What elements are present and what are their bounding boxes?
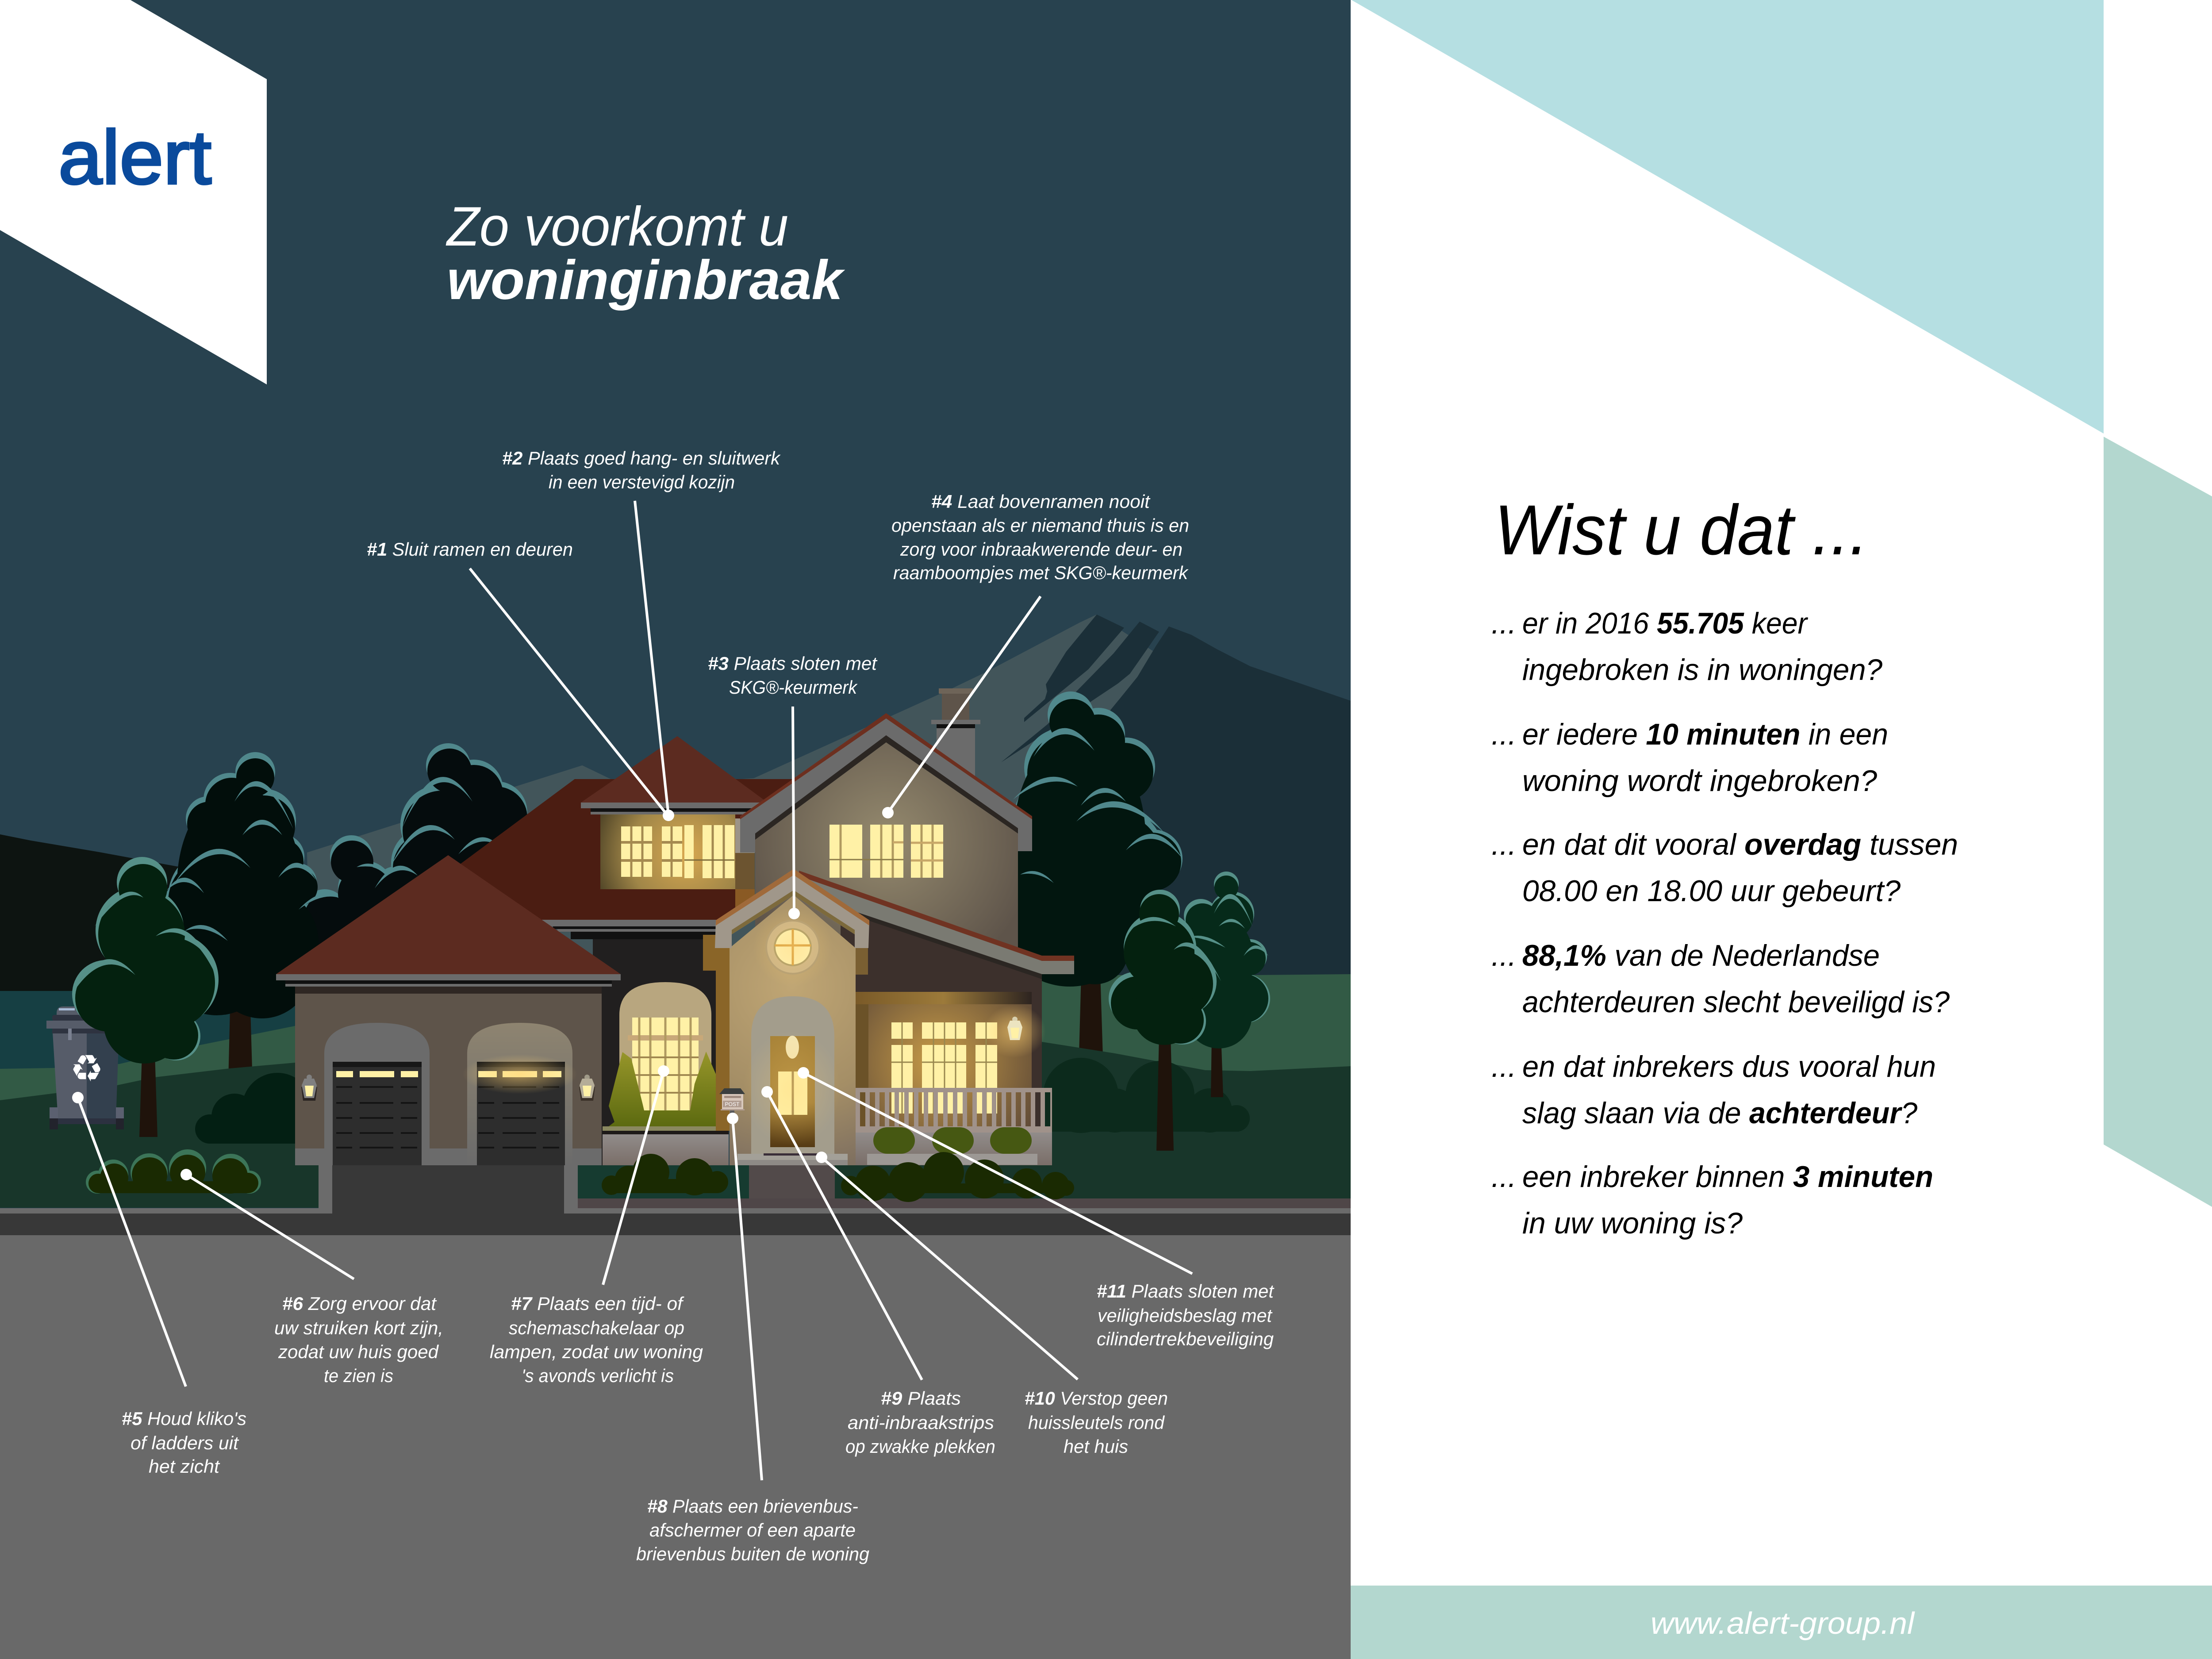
text block: facts: ingebroken is in woningen? <box>1522 653 1882 687</box>
text block: facts: en dat inbrekers dus vooral hun <box>1522 1050 1936 1083</box>
text: tip 11: #11 Plaats sloten met <box>1097 1281 1275 1302</box>
chimney <box>931 688 980 790</box>
text: tip 7: 's avonds verlicht is <box>522 1365 674 1386</box>
mailbox <box>719 1088 745 1118</box>
callout: #11 leader <box>798 1067 1192 1274</box>
text block: facts: 08.00 en 18.00 uur gebeurt? <box>1522 874 1901 908</box>
text: tip 8: afschermer of een aparte <box>649 1520 856 1540</box>
shrub right <box>841 1152 1074 1202</box>
text block: facts: in uw woning is? <box>1522 1206 1743 1240</box>
text: tip 8: #8 Plaats een brievenbus- <box>647 1496 858 1517</box>
text: tip 4: openstaan als er niemand thuis is en <box>891 515 1189 536</box>
mailbox: POST <box>725 1101 740 1107</box>
text: tip 10 <box>1025 1388 1168 1457</box>
illustration: back right small tree <box>1183 872 1270 1097</box>
panel: right info panel <box>1351 0 2212 1659</box>
text: tip 4 <box>891 491 1189 583</box>
callout: #5 leader <box>72 1092 186 1386</box>
illustration: tall tree behind house <box>997 691 1183 1071</box>
shrub left <box>86 1149 261 1194</box>
text: tip 2 <box>502 448 781 492</box>
text: tip 5 <box>122 1408 246 1477</box>
text: tip 9: #9 Plaats <box>881 1388 961 1409</box>
text block: facts: er in 2016 55.705 keer <box>1522 607 1808 640</box>
callout: #4 leader <box>882 596 1041 818</box>
text: tip 9: op zwakke plekken <box>845 1436 995 1457</box>
decoration: top triangle <box>1352 0 2104 434</box>
text: tip 7: lampen, zodat uw woning <box>490 1341 703 1362</box>
callout: #8 leader <box>727 1113 762 1480</box>
text: tip 6: zodat uw huis goed <box>278 1341 439 1362</box>
text: tip 5: #5 Houd kliko's <box>122 1408 246 1429</box>
text: tip 6: te zien is <box>324 1365 393 1386</box>
text block: facts: ... <box>1491 607 1517 640</box>
text: tip 1: #1 Sluit ramen en deuren <box>367 539 573 560</box>
text: tip 10: #10 Verstop geen <box>1025 1388 1168 1409</box>
text: tip 11: veiligheidsbeslag met <box>1098 1305 1273 1326</box>
text: tip 7: schemaschakelaar op <box>509 1317 684 1338</box>
callout: #10 leader <box>816 1152 1078 1379</box>
text: tip 8: brievenbus buiten de woning <box>636 1544 869 1564</box>
callout: #3 leader <box>788 707 800 919</box>
text: tip 6: #6 Zorg ervoor dat <box>282 1293 437 1314</box>
decoration: side band <box>2104 437 2212 1207</box>
cypress shrubs <box>609 1052 726 1126</box>
panel: logo block <box>0 0 267 384</box>
text: tip 5: of ladders uit <box>131 1432 239 1453</box>
icon: recycling symbol: ♻ <box>70 1047 104 1090</box>
text: tip 6 <box>274 1293 443 1386</box>
text: tip 3 <box>708 653 878 698</box>
text block: facts <box>1491 607 1958 1240</box>
callout: #7 leader <box>603 1065 669 1285</box>
callout: #9 leader <box>761 1086 922 1380</box>
text: tip 10: het huis <box>1064 1436 1128 1457</box>
text block: facts: woning wordt ingebroken? <box>1522 764 1877 798</box>
illustration: street and driveway <box>0 1165 1351 1659</box>
text: tip 2: in een verstevigd kozijn <box>549 472 735 492</box>
lamps <box>301 1005 1046 1101</box>
text: tip 10: huissleutels rond <box>1028 1412 1165 1433</box>
shed roof <box>799 871 1074 979</box>
text: tip 9 <box>845 1388 995 1457</box>
logo: alert: alert <box>58 115 211 200</box>
text block: facts: ... <box>1491 828 1517 861</box>
illustration: window glow <box>462 907 833 1094</box>
round window <box>766 921 819 974</box>
illustration: front left tree <box>72 857 219 1137</box>
text block: facts: 88,1% van de Nederlandse <box>1522 939 1880 972</box>
text: tip 3: SKG®-keurmerk <box>729 677 858 698</box>
text block: facts: slag slaan via de achterdeur? <box>1522 1096 1917 1130</box>
shrub centre <box>602 1154 728 1195</box>
garage door right <box>467 1023 572 1165</box>
garage roof <box>276 855 621 974</box>
text: tip 11 <box>1097 1281 1275 1349</box>
dormer with windows <box>581 736 768 920</box>
title: Zo voorkomt u <box>445 196 788 257</box>
callout: #1 leader <box>470 568 666 813</box>
text block: facts: er iedere 10 minuten in een <box>1522 718 1888 751</box>
text: tip 9: anti-inbraakstrips <box>848 1412 994 1433</box>
text: tip 4: raamboompjes met SKG®-keurmerk <box>893 562 1189 583</box>
text: tip 8 <box>636 1496 869 1564</box>
text: tip 6: uw struiken kort zijn, <box>274 1317 443 1338</box>
garage <box>276 855 621 1165</box>
title <box>445 196 845 311</box>
text: tip 3: #3 Plaats sloten met <box>708 653 878 674</box>
heading: Wist u dat: Wist u dat ... <box>1494 490 1868 569</box>
icon: recycling bin <box>46 1006 127 1129</box>
illustration: lower grass <box>0 1035 1351 1208</box>
porch wall <box>841 907 1042 1166</box>
garage door left <box>324 1023 430 1165</box>
illustration: mountains and hills <box>0 614 1351 1208</box>
front door <box>737 996 848 1165</box>
text: tip 11: cilindertrekbeveiliging <box>1097 1329 1274 1349</box>
text block: facts: een inbreker binnen 3 minuten <box>1522 1160 1933 1194</box>
text: tip 4: zorg voor inbraakwerende deur- en <box>900 539 1183 560</box>
illustration: front right small tree <box>1109 890 1221 1151</box>
upper gable roof edge <box>740 713 1032 853</box>
dark central wall <box>593 932 721 1166</box>
illustration: background shrubs <box>195 1058 1250 1144</box>
porch base and railing <box>856 1088 1052 1165</box>
panel: night scene background <box>0 0 1351 1659</box>
text: tip 5: het zicht <box>149 1456 220 1477</box>
callout: #6 leader <box>180 1169 354 1279</box>
text: tip 7: #7 Plaats een tijd- of <box>511 1293 684 1314</box>
front entrance tower <box>703 869 869 1165</box>
text block: facts: en dat dit vooral overdag tussen <box>1522 828 1958 861</box>
upper gable wall <box>755 742 1018 973</box>
upper gable windows <box>830 825 943 878</box>
illustration: house <box>276 688 1074 1166</box>
text: tip 7 <box>490 1293 703 1386</box>
footer: website: www.alert-group.nl <box>1651 1606 1916 1640</box>
porch interior <box>856 992 1032 1126</box>
text block: facts: ... <box>1491 718 1517 751</box>
callout: #2 leader <box>635 501 674 821</box>
porch windows <box>891 1022 997 1114</box>
footer bar <box>1351 1586 2212 1659</box>
title: woninginbraak <box>447 250 845 311</box>
illustration: foreground shrubs <box>86 1149 1074 1202</box>
text block: facts: ... <box>1491 1160 1517 1194</box>
text: tip 4: #4 Laat bovenramen nooit <box>931 491 1151 512</box>
text block: facts: achterdeuren slecht beveiligd is? <box>1522 985 1950 1019</box>
text block: facts: ... <box>1491 939 1517 972</box>
text block: facts: ... <box>1491 1050 1517 1083</box>
text: tip 2: #2 Plaats goed hang- en sluitwerk <box>502 448 781 469</box>
arched front window <box>603 982 729 1165</box>
main upper roof <box>442 779 793 920</box>
illustration: back left trees <box>161 743 527 1100</box>
